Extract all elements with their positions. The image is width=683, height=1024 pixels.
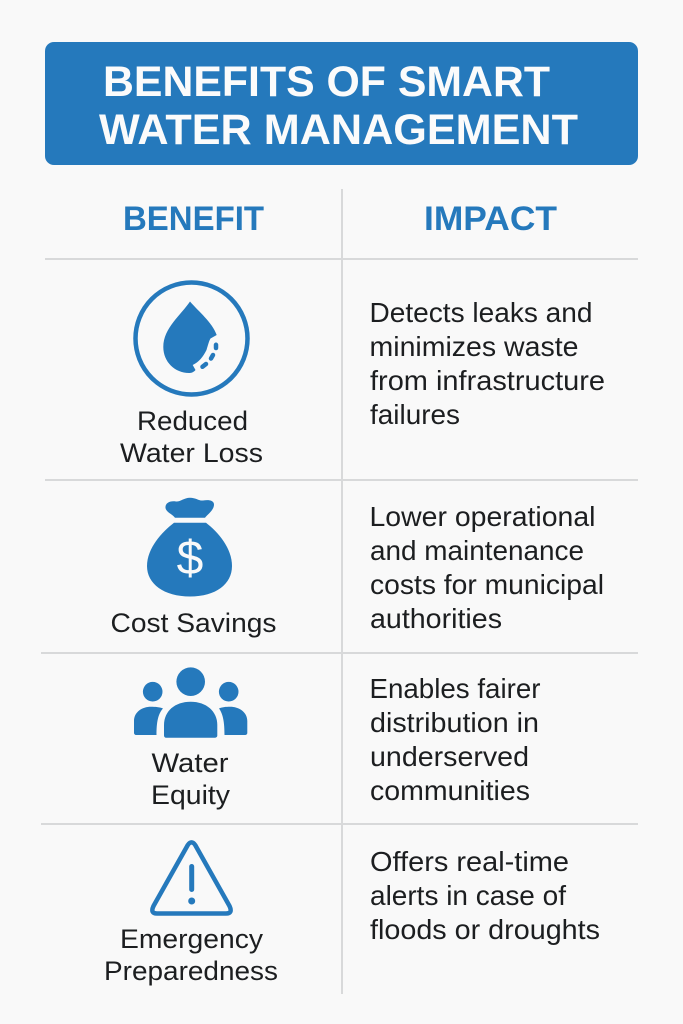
- impact: reduced water loss: minimizes waste: [370, 331, 578, 362]
- icon: water drop: [136, 282, 248, 394]
- impact: emergency preparedness: Offers real-time: [370, 846, 569, 877]
- impact: water equity: underserved: [370, 741, 529, 772]
- impact: cost savings: authorities: [370, 603, 502, 634]
- title banner: [45, 42, 638, 165]
- label: water equity: Water: [152, 748, 228, 778]
- label: reduced water loss: Reduced: [137, 406, 248, 436]
- impact: water equity: [370, 673, 540, 806]
- impact: emergency preparedness: floods or droughts: [370, 914, 600, 945]
- label: reduced water loss: [120, 406, 263, 468]
- impact: cost savings: and maintenance: [370, 535, 584, 566]
- impact: cost savings: costs for municipal: [370, 569, 604, 600]
- column heading: impact: IMPACT: [424, 200, 557, 238]
- icon: warning triangle: [152, 842, 231, 914]
- impact: cost savings: Lower operational: [370, 501, 596, 532]
- label: water equity: [151, 748, 231, 810]
- impact: water equity: distribution in: [370, 707, 539, 738]
- column heading: benefit: BENEFIT: [123, 200, 264, 238]
- title: WATER MANAGEMENT: [99, 106, 578, 154]
- impact: cost savings: [370, 501, 604, 634]
- label: cost savings: Cost Savings: [110, 608, 276, 638]
- impact: reduced water loss: [370, 297, 605, 430]
- label: emergency preparedness: Emergency: [120, 924, 264, 954]
- impact: reduced water loss: failures: [370, 399, 460, 430]
- icon: people: [134, 667, 247, 738]
- label: water equity: Equity: [151, 780, 231, 810]
- label: emergency preparedness: Preparedness: [104, 956, 278, 986]
- impact: reduced water loss: Detects leaks and: [370, 297, 592, 328]
- impact: reduced water loss: from infrastructure: [370, 365, 605, 396]
- title: BENEFITS OF SMART: [103, 58, 550, 106]
- label: emergency preparedness: [104, 924, 278, 986]
- impact: emergency preparedness: alerts in case of: [370, 880, 566, 911]
- label: reduced water loss: Water Loss: [120, 438, 263, 468]
- title: [99, 58, 578, 154]
- impact: emergency preparedness: [370, 846, 600, 945]
- icon: money bag: [147, 498, 232, 596]
- impact: water equity: communities: [370, 775, 530, 806]
- icon: money bag: $: [177, 532, 203, 585]
- impact: water equity: Enables fairer: [370, 673, 540, 704]
